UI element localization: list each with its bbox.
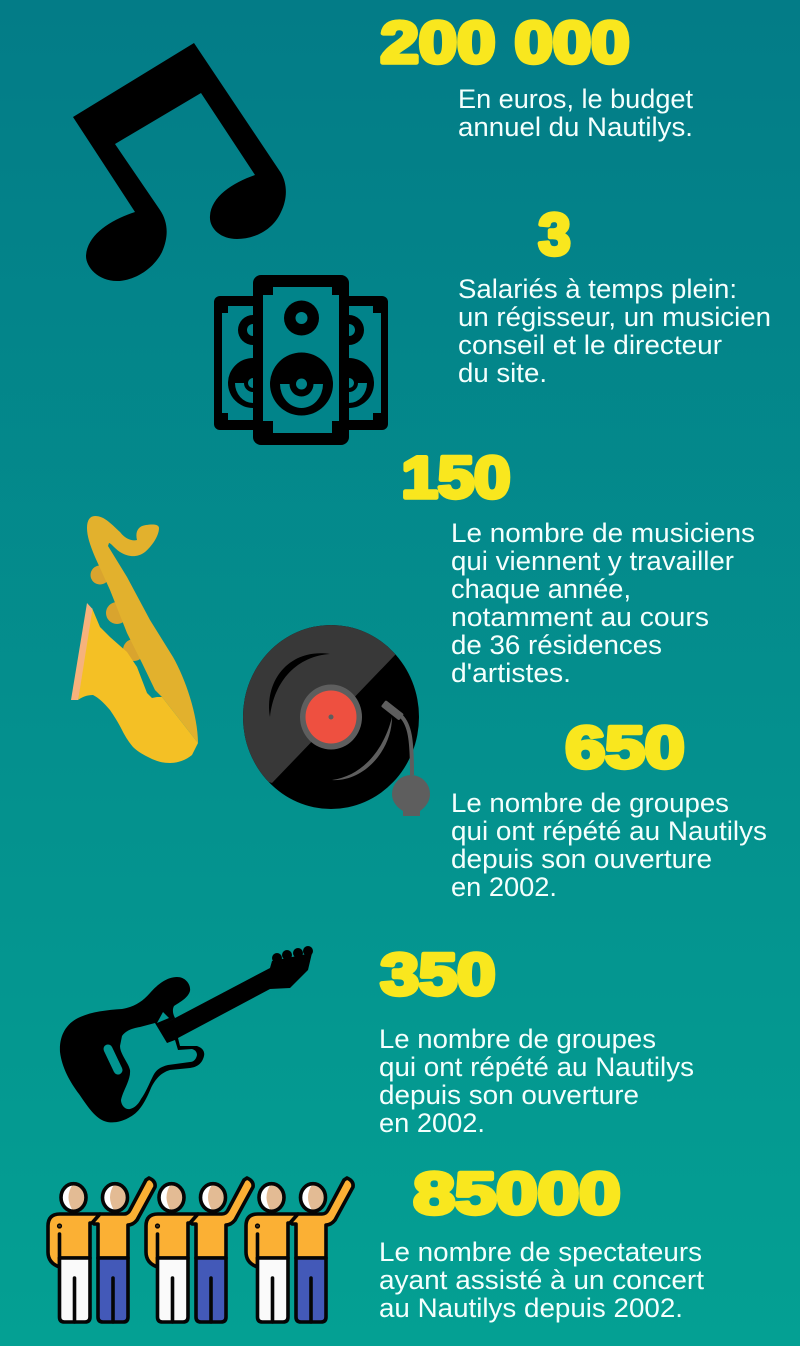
number: 85000: [414, 1162, 620, 1226]
description: [458, 84, 694, 142]
description: Le nombre de spectateurs: [379, 1237, 702, 1267]
description: depuis son ouverture: [379, 1080, 639, 1110]
description: d'artistes.: [451, 658, 571, 688]
description: qui ont répété au Nautilys: [451, 816, 767, 846]
description: du site.: [458, 358, 547, 388]
description: de 36 résidences: [451, 630, 662, 660]
description: depuis son ouverture: [451, 844, 712, 874]
stat: 200 000: [380, 10, 694, 142]
description: Le nombre de musiciens: [451, 518, 755, 548]
description: Le nombre de groupes: [379, 1024, 656, 1054]
description: en 2002.: [451, 872, 557, 902]
description: Le nombre de groupes: [451, 788, 729, 818]
description: en 2002.: [379, 1108, 485, 1138]
icon: vinyl record: [243, 625, 430, 816]
icon: music note: [73, 43, 286, 281]
description: Salariés à temps plein:: [458, 274, 737, 304]
number: 150: [402, 446, 510, 510]
stat: 3: [458, 202, 771, 388]
number: 200 000: [380, 10, 630, 76]
icon: saxophone: [71, 516, 198, 763]
stat: 650: [451, 716, 767, 902]
description: [379, 1237, 705, 1323]
description: [379, 1024, 694, 1138]
description: En euros, le budget: [458, 84, 694, 114]
number: 350: [380, 942, 496, 1008]
description: conseil et le directeur: [458, 330, 722, 360]
description: qui ont répété au Nautilys: [379, 1052, 694, 1082]
description: [458, 274, 771, 388]
stat: 350: [379, 942, 694, 1138]
description: [451, 518, 755, 688]
stat: 85000: [379, 1162, 705, 1323]
description: au Nautilys depuis 2002.: [379, 1293, 683, 1323]
description: annuel du Nautilys.: [458, 112, 693, 142]
number: 650: [566, 716, 684, 780]
number: 3: [538, 202, 570, 268]
description: un régisseur, un musicien: [458, 302, 771, 332]
description: qui viennent y travailler: [451, 546, 734, 576]
description: chaque année,: [451, 574, 631, 604]
description: [451, 788, 767, 902]
icon: crowd of people: [48, 1178, 353, 1322]
stat: 150: [402, 446, 755, 688]
description: ayant assisté à un concert: [379, 1265, 705, 1295]
description: notamment au cours: [451, 602, 709, 632]
icon: speakers: [214, 275, 388, 445]
icon: electric guitar: [60, 946, 313, 1122]
